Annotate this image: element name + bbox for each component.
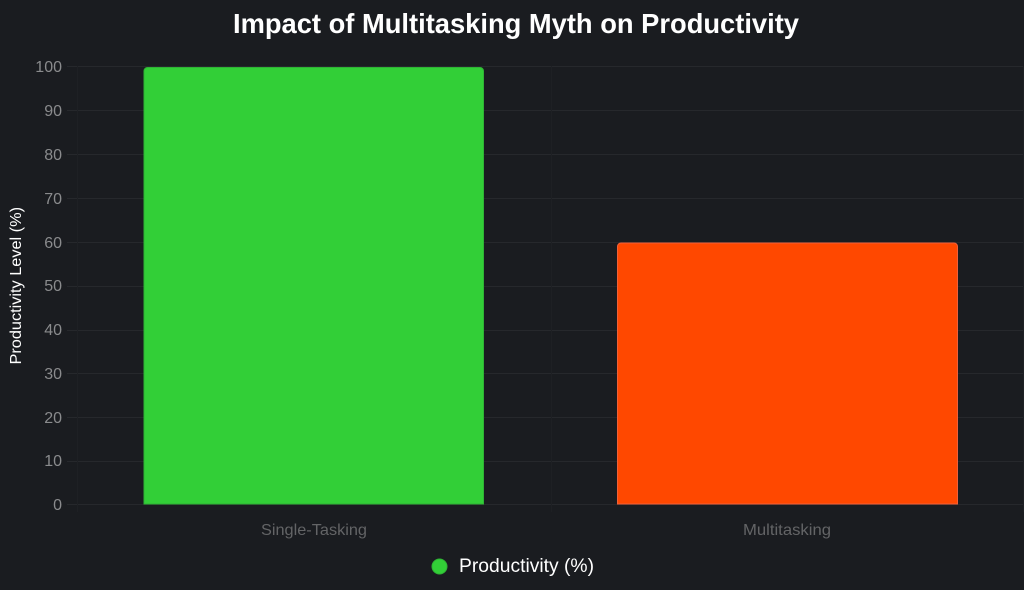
x axis label: single-tasking: Single-Tasking [261, 522, 367, 539]
y axis tick labels: 0 [53, 497, 62, 514]
legend [432, 556, 594, 577]
y axis tick labels: 60 [44, 235, 62, 252]
y axis title: Productivity Level (%) [8, 207, 25, 364]
y axis tick labels [35, 59, 62, 514]
bar: single-tasking 100 [144, 68, 484, 504]
y axis tick labels: 50 [44, 278, 62, 295]
y axis tick labels: 20 [44, 410, 62, 427]
y axis tick labels: 70 [44, 191, 62, 208]
y axis tick labels: 100 [35, 59, 62, 76]
y axis tick labels: 40 [44, 322, 62, 339]
legend marker [432, 559, 447, 574]
y axis tick labels: 10 [44, 453, 62, 470]
y axis tick labels: 90 [44, 103, 62, 120]
bar: multitasking 60 [618, 243, 958, 504]
legend label: Productivity (%) [459, 556, 594, 577]
y axis tick labels: 30 [44, 366, 62, 383]
x axis label: multitasking: Multitasking [743, 522, 831, 539]
y axis tick labels: 80 [44, 147, 62, 164]
title: Impact of Multitasking Myth on Productivity [233, 8, 800, 39]
